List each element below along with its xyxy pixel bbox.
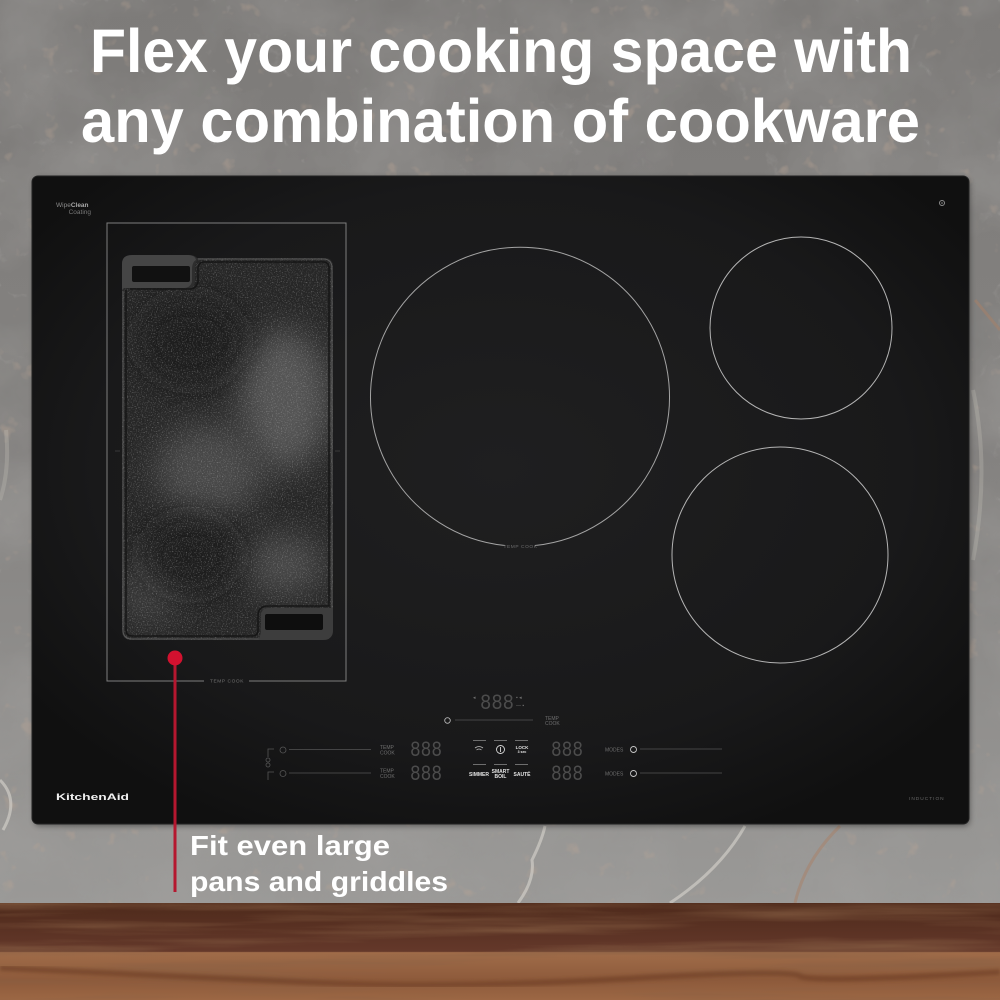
griddle handle top	[122, 255, 196, 290]
callout pointer	[168, 650, 182, 892]
left sync icon	[266, 749, 274, 780]
center buttons: SAUTÉ	[514, 770, 531, 778]
title: Flex your cooking space with	[90, 17, 912, 85]
left slider lower: TEMP	[380, 768, 395, 774]
left slider lower: COOK	[380, 774, 395, 780]
left slider upper	[280, 745, 395, 756]
callout text: Fit even large	[190, 830, 390, 861]
center buttons: SMART	[492, 769, 509, 775]
left slider upper: COOK	[380, 750, 395, 756]
burner large: TEMP COOK	[503, 544, 538, 550]
burner top right	[710, 237, 892, 419]
callout text: pans and griddles	[190, 866, 448, 897]
right slider lower: MODES	[605, 772, 624, 778]
right display lower: 888	[551, 762, 583, 787]
center slider: TEMP	[545, 716, 560, 722]
logo: Wipe Clean coating	[56, 202, 91, 216]
center display top: ▪ ◂	[516, 695, 522, 701]
griddle pan	[120, 250, 336, 645]
right slider lower	[605, 770, 722, 778]
logo: Wipe Clean coating: Coating	[69, 209, 91, 216]
left slider lower	[280, 768, 395, 780]
center buttons: BOIL	[495, 774, 506, 780]
center slider: COOK	[545, 721, 560, 727]
burner bottom right	[672, 447, 888, 663]
title: any combination of cookware	[81, 87, 920, 155]
cooktop panel	[32, 176, 970, 826]
burner large	[371, 247, 670, 550]
center display top: — ▪	[516, 703, 524, 709]
center slider	[445, 716, 560, 727]
right slider upper: MODES	[605, 748, 624, 754]
flex zone outline: TEMP COOK	[210, 678, 244, 684]
center display top: ◂	[473, 695, 476, 701]
wood counter edge	[0, 903, 1000, 1000]
center buttons: SIMMER	[469, 772, 489, 778]
center display top: 888	[480, 691, 514, 716]
left display lower: 888	[410, 762, 442, 787]
right display upper: 888	[551, 738, 583, 763]
title	[81, 17, 920, 155]
griddle handle bottom	[258, 608, 333, 640]
left display upper: 888	[410, 738, 442, 763]
right slider upper	[605, 746, 722, 754]
center buttons: LOCK	[516, 745, 529, 750]
induction label: INDUCTION	[909, 796, 945, 802]
callout text	[190, 830, 448, 897]
flex zone outline	[107, 223, 346, 684]
left slider upper: TEMP	[380, 745, 395, 751]
icon: sensor symbol	[940, 200, 944, 206]
brand logo: KitchenAid	[56, 792, 129, 803]
logo: Wipe Clean coating: WipeClean	[56, 202, 89, 209]
center buttons: 3 sec	[518, 750, 526, 754]
center buttons	[469, 740, 531, 780]
